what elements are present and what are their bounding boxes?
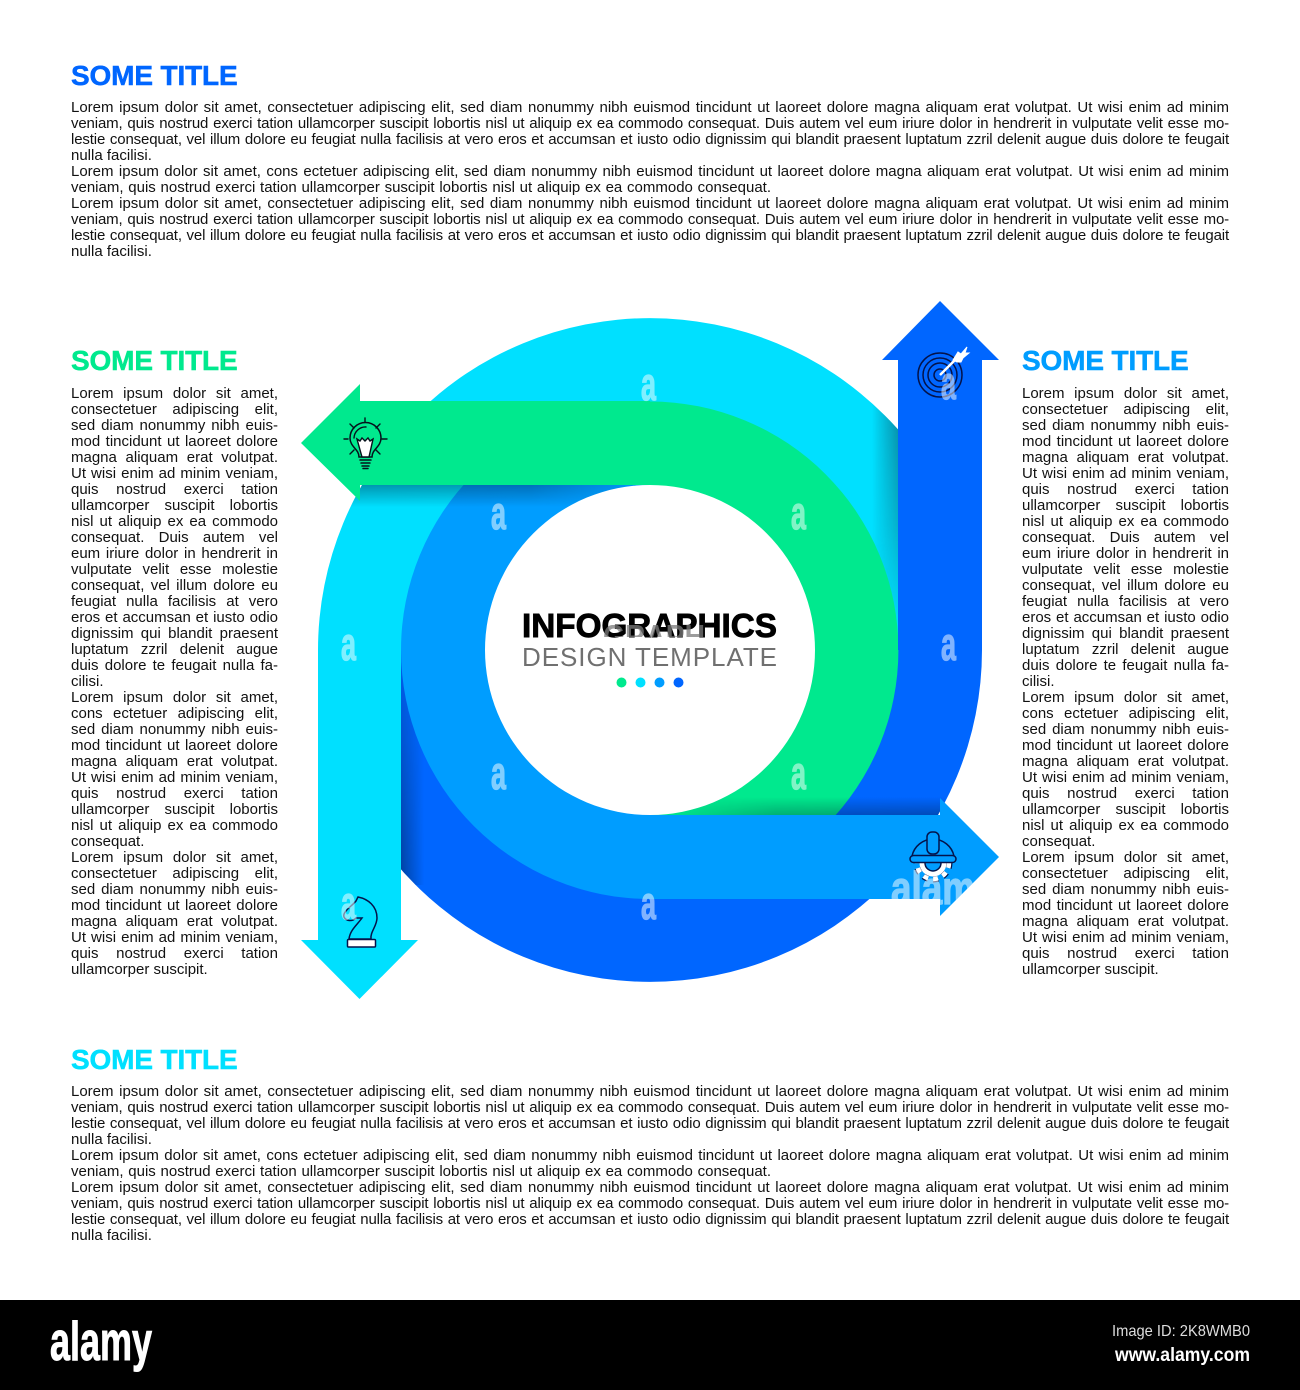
text block: right: quis nostrud exerci tation — [1022, 481, 1229, 498]
text block: top: nulla facilisi. — [71, 243, 152, 260]
text block: left: ullamcorper suscipit. — [71, 961, 208, 978]
footer bar: www.alamy.com — [1114, 1345, 1250, 1366]
text block: right: quis nostrud exerci tation — [1022, 945, 1229, 962]
text block: bottom: lestie consequat, vel illum dolore eu feugiat nulla facilisis at vero eros et accumsan et iusto odio dignissim qui blandit praesent luptatum zzril delenit augue duis dolore te feugait — [71, 1115, 1229, 1132]
arrow: cyan pointing down — [301, 650, 418, 999]
text block: right: Lorem ipsum dolor sit amet, — [1022, 689, 1229, 706]
text block: right: Lorem ipsum dolor sit amet, — [1022, 849, 1229, 866]
watermark letters: a — [491, 487, 506, 539]
text block: right: ullamcorper suscipit lobortis — [1022, 497, 1229, 514]
heading: top: SOME TITLE — [71, 60, 238, 91]
text block: bottom — [71, 1083, 1230, 1244]
text block: left: feugiat nulla facilisis at vero — [71, 593, 278, 610]
text block: left: sed diam nonummy nibh euis- — [71, 881, 278, 898]
watermark letters: a — [341, 618, 356, 670]
heading: left: SOME TITLE — [71, 345, 238, 376]
text block: left: quis nostrud exerci tation — [71, 785, 278, 802]
text block: left: consequat. Duis autem vel — [71, 529, 278, 546]
heading: bottom: SOME TITLE — [71, 1044, 238, 1075]
shadow above the light blue arrow shaft — [678, 799, 945, 815]
center title: DESIGN TEMPLATE — [522, 642, 777, 672]
text block: right: feugiat nulla facilisis at vero — [1022, 593, 1229, 610]
text block: bottom: veniam, quis nostrud exerci tation ullamcorper suscipit lobortis nisl ut aliquip ex ea commodo consequat. Duis autem vel eum iriure dolor in hendrerit in vulputate velit esse mo- — [71, 1099, 1229, 1116]
text block: right: Ut wisi enim ad minim veniam, — [1022, 465, 1229, 482]
text block: left: ullamcorper suscipit lobortis — [71, 497, 278, 514]
text block: left: Ut wisi enim ad minim veniam, — [71, 769, 278, 786]
text block: left: Lorem ipsum dolor sit amet, — [71, 689, 278, 706]
text block: right: consequat. Duis autem vel — [1022, 529, 1229, 546]
watermark letters: alam — [891, 862, 975, 914]
text block: right: sed diam nonummy nibh euis- — [1022, 721, 1229, 738]
text block: left: duis dolore te feugait nulla fa- — [71, 657, 278, 674]
footer bar — [0, 1300, 1300, 1390]
text block: right: magna aliquam erat volutpat. — [1022, 753, 1229, 770]
watermark letters: a — [791, 747, 806, 799]
watermark letters: a — [941, 618, 956, 670]
text block: right: duis dolore te feugait nulla fa- — [1022, 657, 1229, 674]
text block: right: Ut wisi enim ad minim veniam, — [1022, 929, 1229, 946]
icon: hard hat with gear — [910, 832, 956, 879]
text block: left: magna aliquam erat volutpat. — [71, 753, 278, 770]
watermark letters: a — [341, 877, 356, 929]
text block: right: mod tincidunt ut laoreet dolore — [1022, 897, 1229, 914]
text block: right: quis nostrud exerci tation — [1022, 785, 1229, 802]
text block: right: nisl ut aliquip ex ea commodo — [1022, 817, 1229, 834]
text block: right: sed diam nonummy nibh euis- — [1022, 881, 1229, 898]
center title: GRAPH — [603, 618, 705, 655]
text block: left: eum iriure dolor in hendrerit in — [71, 545, 278, 562]
light blue inner arc — [401, 401, 650, 899]
text block: right: dignissim qui blandit praesent — [1022, 625, 1229, 642]
text block: right: consequat, vel illum dolore eu — [1022, 577, 1229, 594]
text block: left: mod tincidunt ut laoreet dolore — [71, 737, 278, 754]
text block: bottom: nulla facilisi. — [71, 1131, 152, 1148]
text block: top: veniam, quis nostrud exerci tation ullamcorper suscipit lobortis nisl ut aliquip ex ea commodo consequat. Duis autem vel eum iriure dolor in hendrerit in vulputate velit esse mo- — [71, 115, 1229, 132]
green inner arc — [650, 402, 898, 898]
arrow: dark blue pointing up — [882, 301, 999, 650]
text block: top: lestie consequat, vel illum dolore eu feugiat nulla facilisis at vero eros et accumsan et iusto odio dignissim qui blandit praesent luptatum zzril delenit augue duis dolore te feugait — [71, 131, 1229, 148]
text block: left: quis nostrud exerci tation — [71, 481, 278, 498]
text block: top: nulla facilisi. — [71, 147, 152, 164]
text block: right: eum iriure dolor in hendrerit in — [1022, 545, 1229, 562]
text block: right: consectetuer adipiscing elit, — [1022, 401, 1229, 418]
arrow: green pointing left — [301, 384, 650, 501]
text block: top: lestie consequat, vel illum dolore eu feugiat nulla facilisis at vero eros et accumsan et iusto odio dignissim qui blandit praesent luptatum zzril delenit augue duis dolore te feugait — [71, 227, 1229, 244]
infographic diagram — [0, 301, 1300, 1390]
text block: left — [71, 385, 278, 978]
text block: left: consequat, vel illum dolore eu — [71, 577, 278, 594]
text block: right: magna aliquam erat volutpat. — [1022, 449, 1229, 466]
text block: right: Ut wisi enim ad minim veniam, — [1022, 769, 1229, 786]
text block: left: ullamcorper suscipit lobortis — [71, 801, 278, 818]
text block: top: veniam, quis nostrud exerci tation ullamcorper suscipit lobortis nisl ut aliquip ex ea commodo consequat. Duis autem vel eum iriure dolor in hendrerit in vulputate velit esse mo- — [71, 211, 1229, 228]
text block: left: nisl ut aliquip ex ea commodo — [71, 817, 278, 834]
text block: top — [71, 99, 1230, 260]
text block: top: Lorem ipsum dolor sit amet, cons ectetuer adipiscing elit, sed diam nonummy nibh euismod tincidunt ut laoreet dolore magna aliquam erat volutpat. Ut wisi enim ad minim — [71, 163, 1229, 180]
text block: left: magna aliquam erat volutpat. — [71, 449, 278, 466]
text block: right: mod tincidunt ut laoreet dolore — [1022, 433, 1229, 450]
shadow under the green arrow shaft — [352, 485, 636, 504]
icon: chess knight — [344, 897, 377, 947]
text block: left: sed diam nonummy nibh euis- — [71, 417, 278, 434]
text block: top: Lorem ipsum dolor sit amet, consectetuer adipiscing elit, sed diam nonummy nibh euismod tincidunt ut laoreet dolore magna aliquam erat volutpat. Ut wisi enim ad minim — [71, 99, 1229, 116]
text block: left: mod tincidunt ut laoreet dolore — [71, 433, 278, 450]
center title: INFOGRAPHICS — [522, 608, 777, 645]
center dots — [616, 678, 684, 688]
watermark letters: a — [941, 357, 956, 409]
text block: top: Lorem ipsum dolor sit amet, consectetuer adipiscing elit, sed diam nonummy nibh euismod tincidunt ut laoreet dolore magna aliquam erat volutpat. Ut wisi enim ad minim — [71, 195, 1229, 212]
dark blue outer arc — [318, 650, 982, 982]
text block: right: cons ectetuer adipiscing elit, — [1022, 705, 1229, 722]
text block: bottom: Lorem ipsum dolor sit amet, consectetuer adipiscing elit, sed diam nonummy nibh euismod tincidunt ut laoreet dolore magna aliquam erat volutpat. Ut wisi enim ad minim — [71, 1083, 1229, 1100]
shadow cast on dark blue arc by the down arrow — [401, 658, 422, 885]
text block: left: Lorem ipsum dolor sit amet, — [71, 849, 278, 866]
text block: left: consequat. — [71, 833, 144, 850]
text block: left: Ut wisi enim ad minim veniam, — [71, 465, 278, 482]
text block: right: cilisi. — [1022, 673, 1054, 690]
footer bar: alamy — [50, 1310, 152, 1372]
footer bar: Image ID: 2K8WMB0 — [1112, 1323, 1250, 1340]
text block: right: nisl ut aliquip ex ea commodo — [1022, 513, 1229, 530]
text block: left: cons ectetuer adipiscing elit, — [71, 705, 278, 722]
text block: right: consequat. — [1022, 833, 1095, 850]
text block: top: veniam, quis nostrud exerci tation ullamcorper suscipit lobortis nisl ut aliquip ex ea commodo consequat. — [71, 179, 771, 196]
text block: left: cilisi. — [71, 673, 104, 690]
text block: right: eros et accumsan et iusto odio — [1022, 609, 1229, 626]
watermark letters — [341, 357, 975, 929]
text block: left: vulputate velit esse molestie — [71, 561, 278, 578]
text block: right: sed diam nonummy nibh euis- — [1022, 417, 1229, 434]
text block: left: eros et accumsan et iusto odio — [71, 609, 278, 626]
text block: bottom: veniam, quis nostrud exerci tation ullamcorper suscipit lobortis nisl ut aliquip ex ea commodo consequat. — [71, 1163, 771, 1180]
text block: right: ullamcorper suscipit lobortis — [1022, 801, 1229, 818]
text block: left: consectetuer adipiscing elit, — [71, 865, 278, 882]
arrow: light blue pointing right — [650, 798, 999, 916]
text block: right: consectetuer adipiscing elit, — [1022, 865, 1229, 882]
text block: left: mod tincidunt ut laoreet dolore — [71, 897, 278, 914]
text block: left: dignissim qui blandit praesent — [71, 625, 278, 642]
text block: bottom: Lorem ipsum dolor sit amet, consectetuer adipiscing elit, sed diam nonummy nibh euismod tincidunt ut laoreet dolore magna aliquam erat volutpat. Ut wisi enim ad minim — [71, 1179, 1229, 1196]
watermark letters: a — [641, 358, 656, 410]
shadow cast on cyan arc by the up arrow — [874, 406, 898, 621]
text block: left: consectetuer adipiscing elit, — [71, 401, 278, 418]
text block: right: mod tincidunt ut laoreet dolore — [1022, 737, 1229, 754]
text block: left: Lorem ipsum dolor sit amet, — [71, 385, 278, 402]
text block: right: vulputate velit esse molestie — [1022, 561, 1229, 578]
text block: left: luptatum zzril delenit augue — [71, 641, 278, 658]
text block: left: sed diam nonummy nibh euis- — [71, 721, 278, 738]
cyan outer arc — [318, 318, 982, 650]
heading: right: SOME TITLE — [1022, 345, 1189, 376]
text block: right: luptatum zzril delenit augue — [1022, 641, 1229, 658]
text block: right: Lorem ipsum dolor sit amet, — [1022, 385, 1229, 402]
icon: target with dart — [918, 347, 969, 397]
text block: right: magna aliquam erat volutpat. — [1022, 913, 1229, 930]
text block: right: ullamcorper suscipit. — [1022, 961, 1159, 978]
text block: right — [1022, 385, 1229, 978]
watermark letters: a — [641, 877, 656, 929]
text block: left: Ut wisi enim ad minim veniam, — [71, 929, 278, 946]
text block: bottom: veniam, quis nostrud exerci tation ullamcorper suscipit lobortis nisl ut aliquip ex ea commodo consequat. Duis autem vel eum iriure dolor in hendrerit in vulputate velit esse mo- — [71, 1195, 1229, 1212]
watermark letters: a — [491, 747, 506, 799]
text block: bottom: Lorem ipsum dolor sit amet, cons ectetuer adipiscing elit, sed diam nonummy nibh euismod tincidunt ut laoreet dolore magna aliquam erat volutpat. Ut wisi enim ad minim — [71, 1147, 1229, 1164]
text block: left: nisl ut aliquip ex ea commodo — [71, 513, 278, 530]
icon: light bulb — [344, 418, 387, 468]
text block: left: magna aliquam erat volutpat. — [71, 913, 278, 930]
text block: bottom: lestie consequat, vel illum dolore eu feugiat nulla facilisis at vero eros et accumsan et iusto odio dignissim qui blandit praesent luptatum zzril delenit augue duis dolore te feugait — [71, 1211, 1229, 1228]
watermark letters: a — [791, 487, 806, 539]
text block: bottom: nulla facilisi. — [71, 1227, 152, 1244]
text block: left: quis nostrud exerci tation — [71, 945, 278, 962]
center title — [524, 613, 776, 666]
